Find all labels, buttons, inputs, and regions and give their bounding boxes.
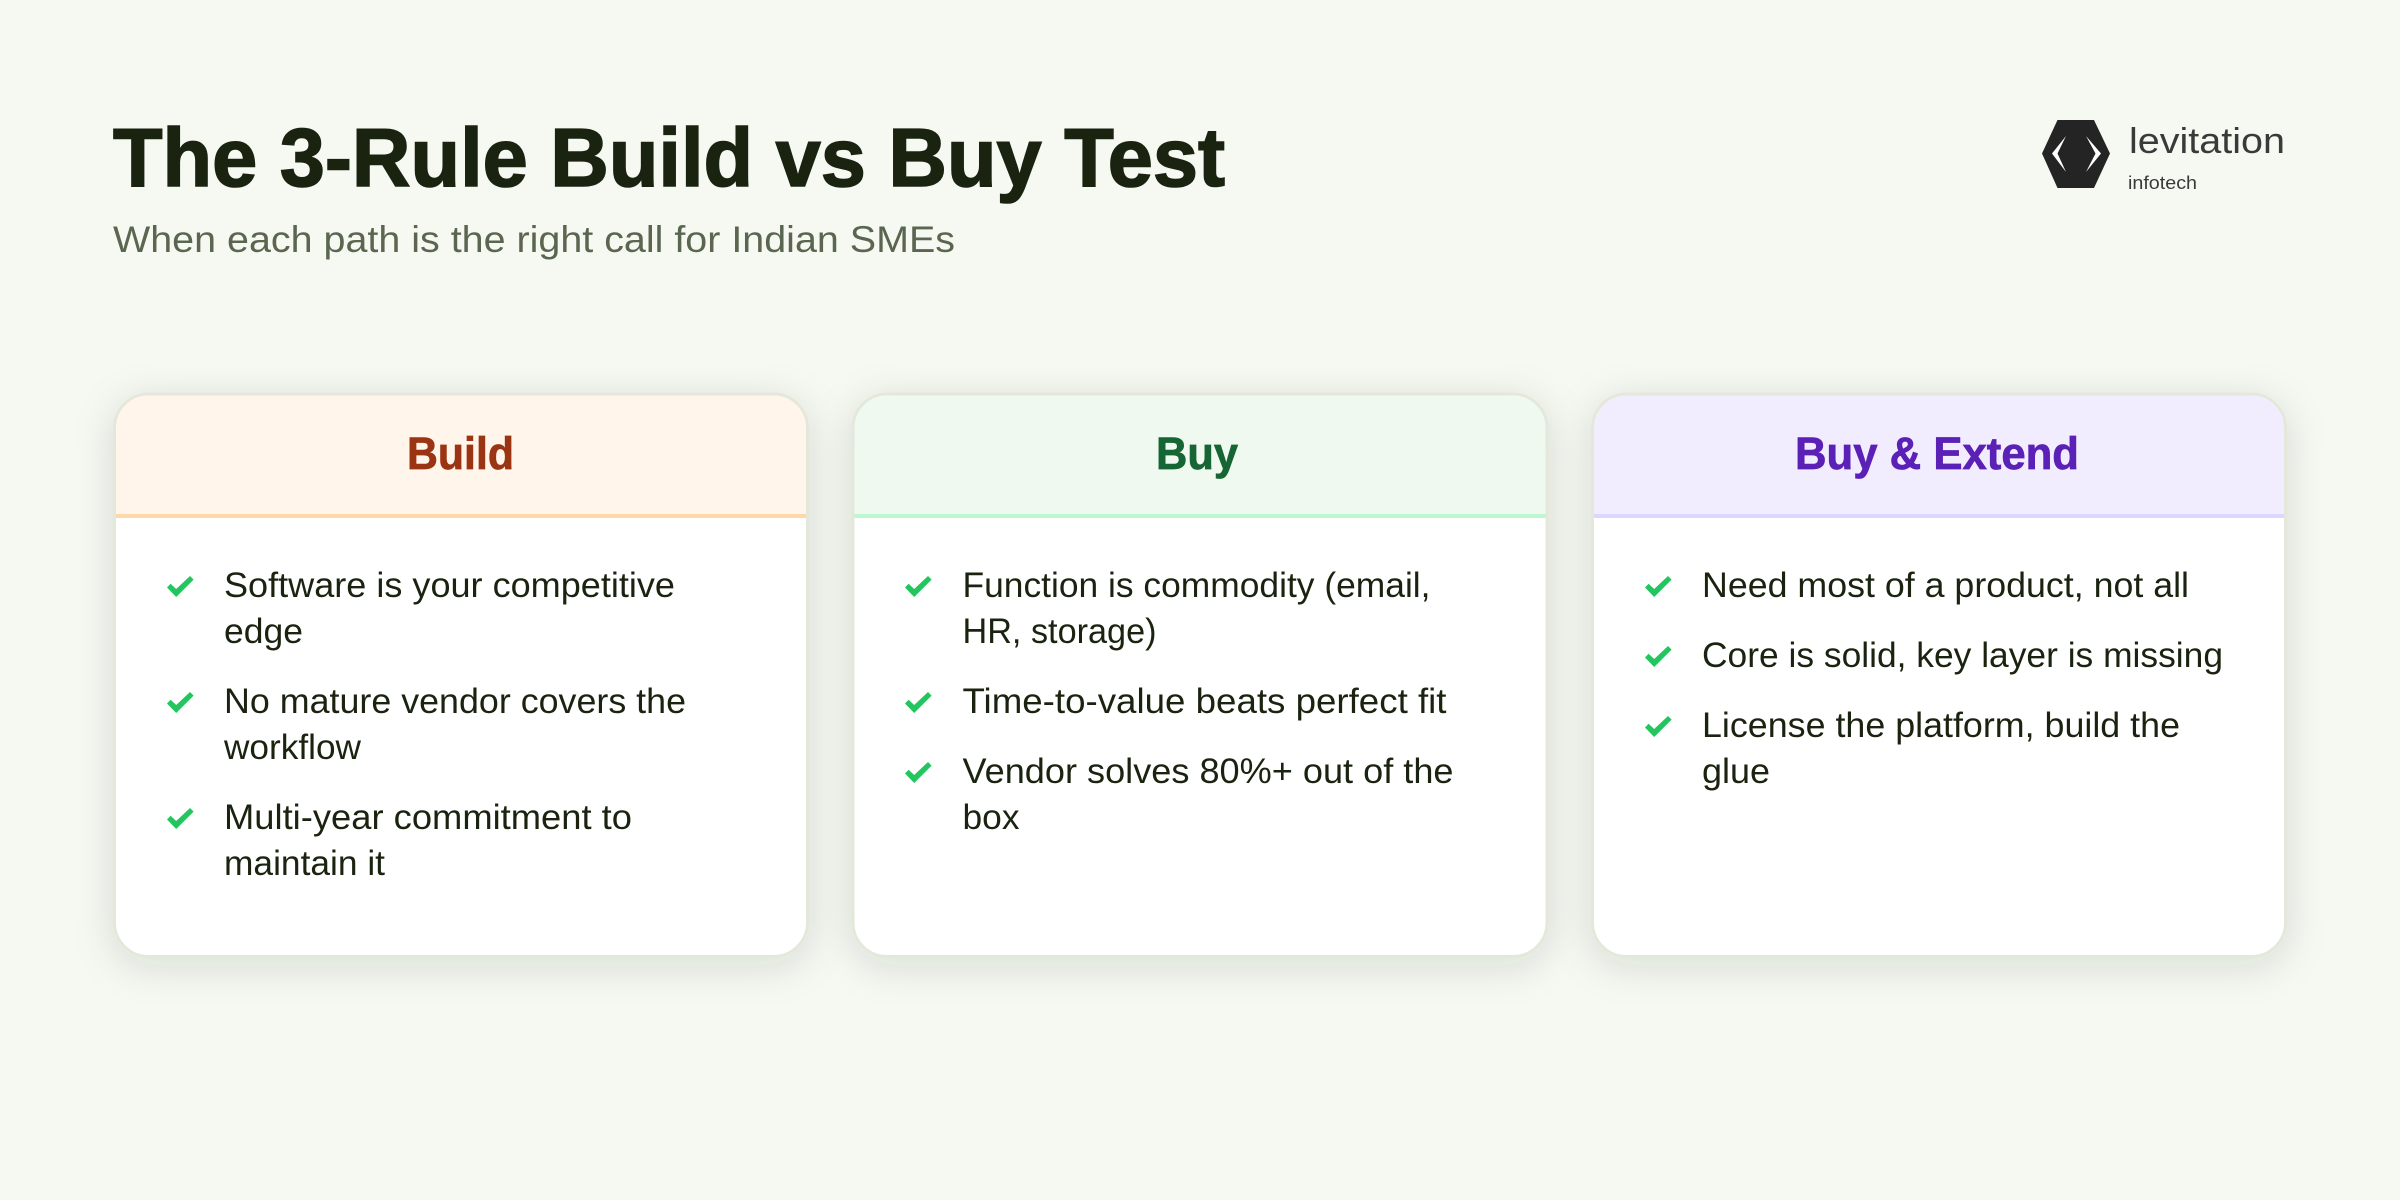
logo wordmark: levitation [2129,120,2285,161]
item: multi-year commitment: maintain it [224,843,385,883]
logo tagline: infotech [2128,173,2197,193]
panel header: Buy: Buy [1156,428,1238,479]
item: license the platform [1645,705,2180,791]
item: vendor solves 80%: box [962,797,1020,837]
item: commodity function [905,565,1430,651]
panel header: Build [116,396,806,518]
item: vendor solves 80% [905,751,1454,837]
item: need most of a product: Need most of a product, not all [1702,565,2189,605]
panel header: Buy [854,396,1546,518]
item: vendor solves 80%: Vendor solves 80%+ out of the [962,751,1454,791]
panel: Buy [853,394,1547,956]
item: license the platform: License the platform, build the [1702,705,2180,745]
item: no mature vendor [167,681,686,767]
item: commodity function: Function is commodity (email, [962,565,1430,605]
panel: Build [114,394,808,956]
item: no mature vendor: No mature vendor covers the [224,681,686,721]
item: competitive edge: edge [224,611,303,651]
item: competitive edge [167,565,675,651]
item: license the platform: glue [1702,751,1770,791]
item: competitive edge: Software is your competitive [224,565,675,605]
item: multi-year commitment [167,797,632,883]
item: commodity function: HR, storage) [962,611,1156,651]
panel: Buy & Extend [1592,394,2286,956]
logo: levitation infotech [2042,120,2285,193]
list: Build criteria [167,565,686,883]
item: time-to-value: Time-to-value beats perfect fit [962,681,1447,721]
list: Buy & Extend criteria [1645,565,2223,791]
panel header: Build: Build [407,428,514,479]
item: core is solid: Core is solid, key layer is missing [1702,635,2223,675]
list: Buy criteria [905,565,1454,837]
subtitle: When each path is the right call for Indian SMEs [113,219,955,260]
item: multi-year commitment: Multi-year commitment to [224,797,632,837]
panel header: Buy & Extend [1594,396,2284,518]
panel header: Buy & Extend: Buy & Extend [1795,428,2079,479]
item: no mature vendor: workflow [223,727,361,767]
icon: hexagon code mark [2042,120,2110,188]
title: The 3-Rule Build vs Buy Test [113,111,1225,204]
